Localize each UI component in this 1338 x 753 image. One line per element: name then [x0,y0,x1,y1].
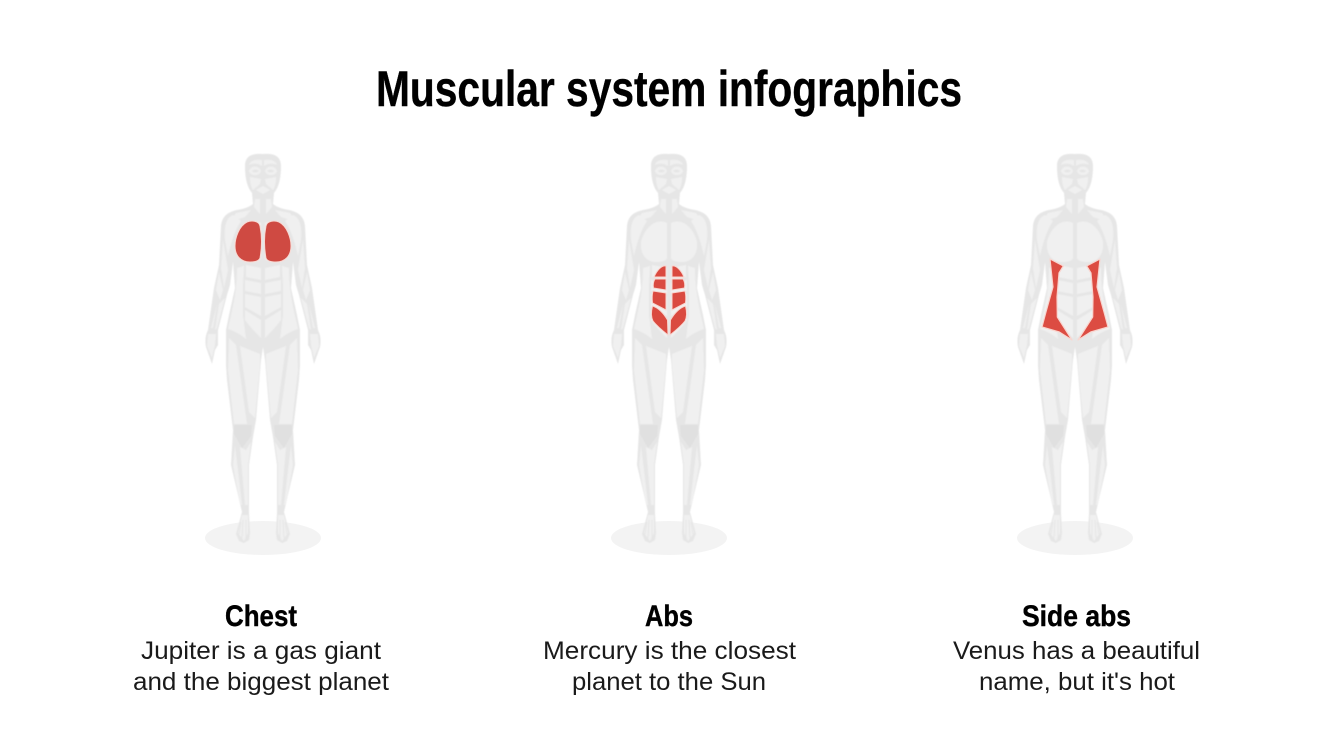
panel: chest [133,154,389,696]
panel: abs [543,154,796,696]
figure: body with abs highlighted [611,154,727,555]
text: chest description: and the biggest planet [133,668,389,696]
title: Muscular system infographics [376,61,962,117]
heading: Abs: Abs [645,600,693,633]
text: abs description: planet to the Sun [572,668,766,696]
heading: Chest: Chest [225,600,297,633]
figure: body with chest highlighted [205,154,321,555]
text: side abs description [953,637,1200,696]
heading: Side abs: Side abs [1022,600,1131,633]
figure: body with side abs highlighted [1017,154,1133,555]
text: side abs description: Venus has a beautiful [953,637,1200,665]
text: abs description: Mercury is the closest [543,637,796,665]
text: chest description [133,637,389,696]
text: side abs description: name, but it's hot [979,668,1175,696]
text: chest description: Jupiter is a gas giant [141,637,381,665]
panel: side abs [953,154,1200,696]
text: abs description [543,637,796,696]
